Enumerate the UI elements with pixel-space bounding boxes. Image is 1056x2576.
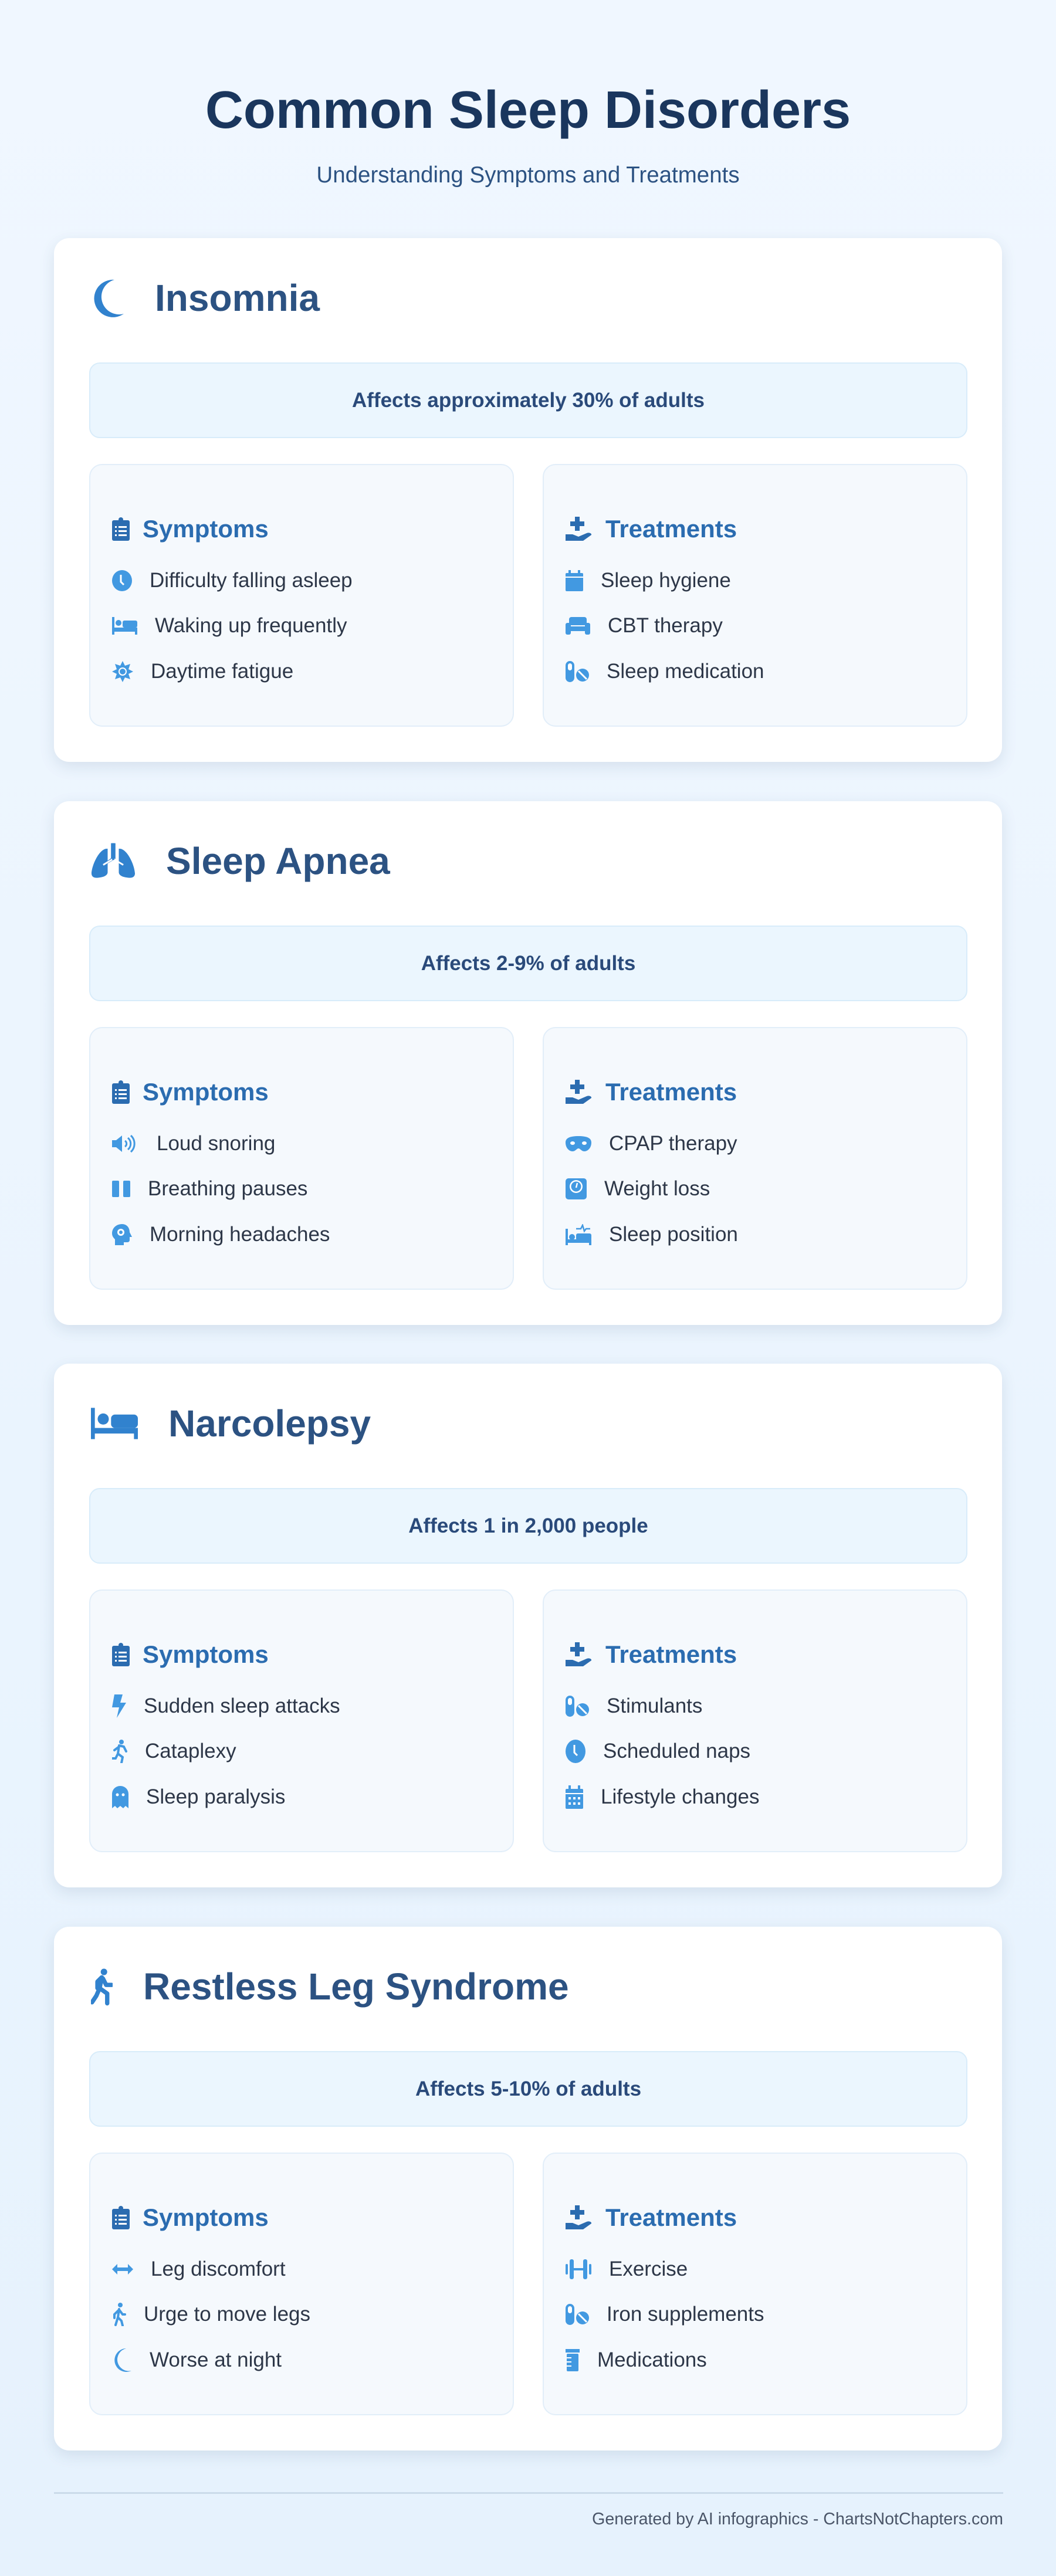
heading: insomnia: Insomnia xyxy=(155,277,320,319)
item: Lifestyle changes xyxy=(601,1785,759,1808)
item: Weight loss xyxy=(604,1177,710,1200)
item: Sudden sleep attacks xyxy=(144,1694,340,1717)
treatments heading: Treatments xyxy=(605,2204,737,2231)
stat box xyxy=(89,1488,967,1564)
panel: symptoms xyxy=(89,2153,514,2415)
item: Sleep hygiene xyxy=(601,569,731,592)
item: Difficulty falling asleep xyxy=(150,569,353,592)
item: Sleep position xyxy=(609,1223,738,1246)
stat box xyxy=(89,362,967,438)
title: Common Sleep Disorders xyxy=(205,81,851,140)
card: sleep apnea xyxy=(54,801,1002,1325)
panel: treatments xyxy=(543,2153,967,2415)
item: Breathing pauses xyxy=(148,1177,307,1200)
panel: symptoms xyxy=(89,464,514,727)
item: Iron supplements xyxy=(607,2303,764,2326)
stat box: Affects 5-10% of adults xyxy=(415,2077,641,2100)
symptoms heading: Symptoms xyxy=(143,1640,269,1668)
card: narcolepsy xyxy=(54,1364,1002,1887)
item xyxy=(566,2258,688,2280)
item: Sleep medication xyxy=(607,660,764,683)
stat box: Affects approximately 30% of adults xyxy=(352,388,705,412)
item: Stimulants xyxy=(607,1694,702,1717)
item: Daytime fatigue xyxy=(151,660,293,683)
treatments heading: Treatments xyxy=(605,1078,737,1106)
stat box xyxy=(89,2051,967,2127)
subtitle: Understanding Symptoms and Treatments xyxy=(316,162,740,188)
stat box: Affects 1 in 2,000 people xyxy=(408,1514,648,1537)
item: Leg discomfort xyxy=(151,2258,286,2280)
card: restless leg syndrome xyxy=(54,1927,1002,2450)
item: CBT therapy xyxy=(608,614,723,637)
footer: Generated by AI infographics - ChartsNotChapters.com xyxy=(592,2510,1003,2528)
item: Morning headaches xyxy=(150,1223,330,1246)
treatments heading: Treatments xyxy=(605,1640,737,1668)
heading: restless leg syndrome: Restless Leg Syndrome xyxy=(143,1965,569,2008)
stat box xyxy=(89,926,967,1001)
panel: symptoms xyxy=(89,1027,514,1290)
item: Worse at night xyxy=(150,2348,282,2371)
item: Scheduled naps xyxy=(603,1740,750,1762)
symptoms heading: Symptoms xyxy=(143,2204,269,2231)
symptoms heading: Symptoms xyxy=(143,1078,269,1106)
treatments heading: Treatments xyxy=(605,515,737,543)
item: Exercise xyxy=(609,2258,688,2280)
item: CPAP therapy xyxy=(609,1132,737,1155)
panel: treatments xyxy=(543,464,967,727)
panel: treatments xyxy=(543,1027,967,1290)
stat box: Affects 2-9% of adults xyxy=(421,951,635,975)
item: Waking up frequently xyxy=(155,614,347,637)
item: Urge to move legs xyxy=(144,2303,310,2326)
item: Cataplexy xyxy=(145,1740,236,1762)
item: Medications xyxy=(597,2348,707,2371)
item: Loud snoring xyxy=(157,1132,275,1155)
card: insomnia xyxy=(54,238,1002,762)
heading: sleep apnea: Sleep Apnea xyxy=(166,840,390,882)
heading: narcolepsy: Narcolepsy xyxy=(168,1402,371,1445)
item: Sleep paralysis xyxy=(146,1785,285,1808)
symptoms heading: Symptoms xyxy=(143,515,269,543)
panel: symptoms xyxy=(89,1589,514,1852)
panel: treatments xyxy=(543,1589,967,1852)
